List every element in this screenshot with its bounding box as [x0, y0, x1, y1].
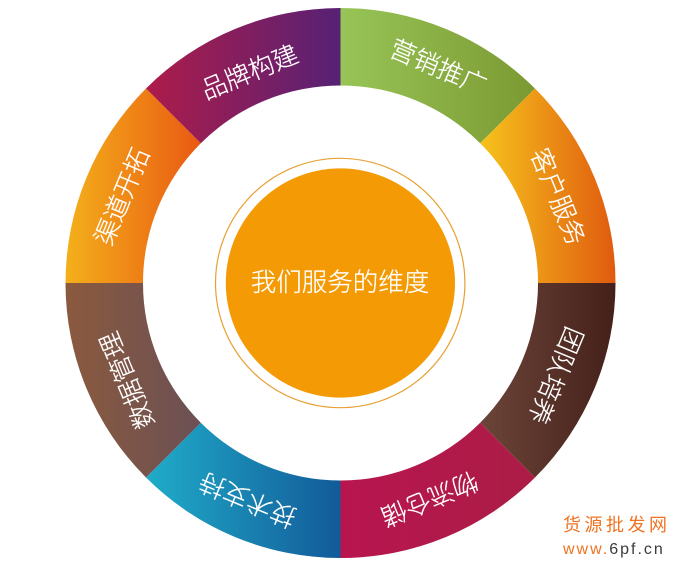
- label: 客户服务: 客户服务: [525, 145, 589, 249]
- label: 物流仓储: 物流仓储: [377, 466, 481, 530]
- center title: 我们服务的维度: [251, 269, 429, 297]
- label: 品牌构建: 品牌构建: [198, 41, 302, 105]
- segment: 品牌构建: [146, 8, 340, 143]
- label: 营销推广: 营销推广: [386, 35, 490, 101]
- label: 团队培养: 团队培养: [523, 323, 587, 427]
- segment: 技术支持: [146, 423, 340, 558]
- segment: 渠道开拓: [65, 88, 201, 283]
- label: 渠道开拓: 渠道开拓: [91, 145, 155, 249]
- label: 技术支持: 技术支持: [196, 467, 300, 531]
- watermark name: 货源批发网: [563, 511, 670, 537]
- segment: 团队培养: [480, 283, 616, 478]
- segment: 营销推广: [340, 8, 535, 143]
- label: 数据管理: 数据管理: [96, 328, 160, 432]
- segment: 物流仓储: [340, 423, 535, 558]
- watermark url: www.6pf.cn: [562, 541, 665, 558]
- watermark: [562, 511, 670, 558]
- segment: 数据管理: [65, 283, 201, 478]
- segment: 客户服务: [480, 88, 616, 283]
- center hub: [216, 158, 465, 408]
